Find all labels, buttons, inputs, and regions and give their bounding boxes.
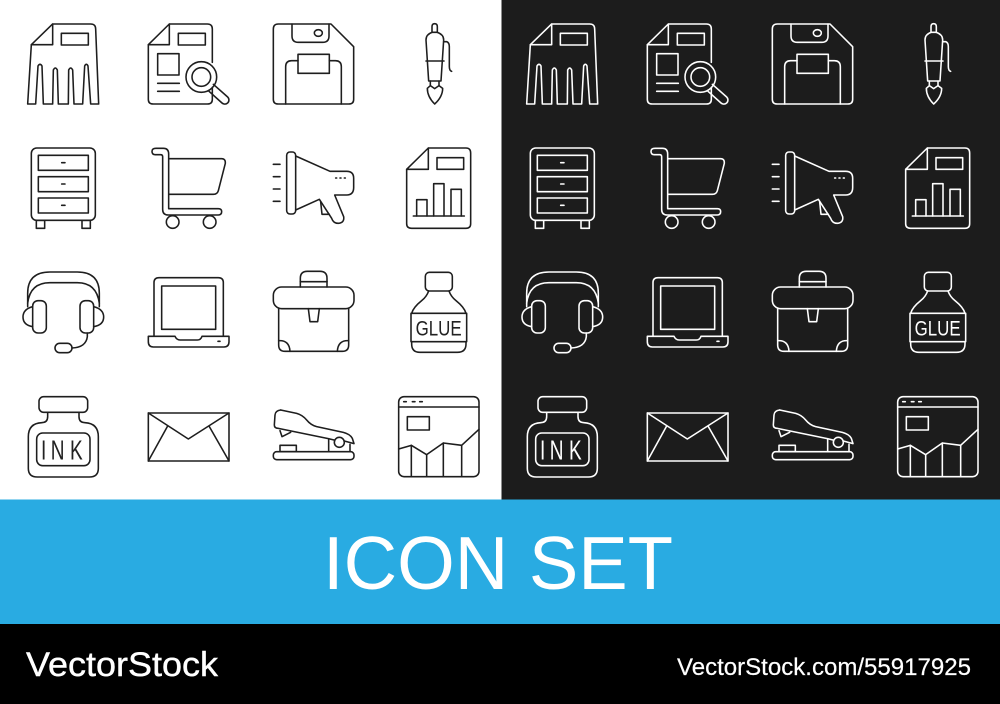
icon: megaphone <box>772 152 853 223</box>
icon: glue bottle: GLUE <box>915 316 961 340</box>
icon: laptop <box>148 278 229 347</box>
title: ICON SET <box>323 521 673 605</box>
icon: shopping cart <box>651 148 724 228</box>
icon: document search <box>647 24 728 104</box>
icon: shredded document <box>527 24 598 104</box>
icon: briefcase <box>772 271 853 351</box>
icon: drawer cabinet <box>31 148 95 228</box>
icon: floppy disk <box>273 24 354 104</box>
image id text: VectorStock.com/55917925 <box>677 654 971 681</box>
icon: glue bottle <box>910 272 966 352</box>
icon: drawer cabinet <box>530 148 594 228</box>
panel: dark background <box>502 0 1000 500</box>
icon: browser window chart <box>898 397 978 477</box>
brand logo text: VectorStock <box>26 646 219 684</box>
icon: fountain pen <box>426 24 452 104</box>
icon: floppy disk <box>772 24 853 104</box>
icon: headset <box>522 272 603 353</box>
icon: ink bottle <box>28 397 98 477</box>
icon: stapler <box>273 410 354 460</box>
icon: glue bottle <box>411 272 467 352</box>
icon: briefcase <box>273 271 354 351</box>
icon: laptop <box>647 278 728 347</box>
panel: dark icon set <box>522 24 978 477</box>
icon: stapler <box>772 410 853 460</box>
icon: megaphone <box>273 152 354 223</box>
icon: headset <box>23 272 104 353</box>
icon: ink bottle <box>527 397 597 477</box>
icon: envelope <box>647 413 728 461</box>
icon: document search <box>148 24 229 104</box>
icon: ink bottle: INK <box>41 435 83 466</box>
icon: browser window chart <box>399 397 479 477</box>
panel: light icon set <box>23 24 479 477</box>
icon: shredded document <box>28 24 99 104</box>
icon: envelope <box>148 413 229 461</box>
icon: shopping cart <box>152 148 225 228</box>
icon: bar chart document <box>407 148 471 228</box>
icon: fountain pen <box>925 24 951 104</box>
panel: white background <box>0 0 502 500</box>
black footer <box>0 624 1000 704</box>
blue banner <box>0 500 1000 624</box>
icon: bar chart document <box>906 148 970 228</box>
icon: glue bottle: GLUE <box>416 316 462 340</box>
icon: ink bottle: INK <box>540 435 582 466</box>
